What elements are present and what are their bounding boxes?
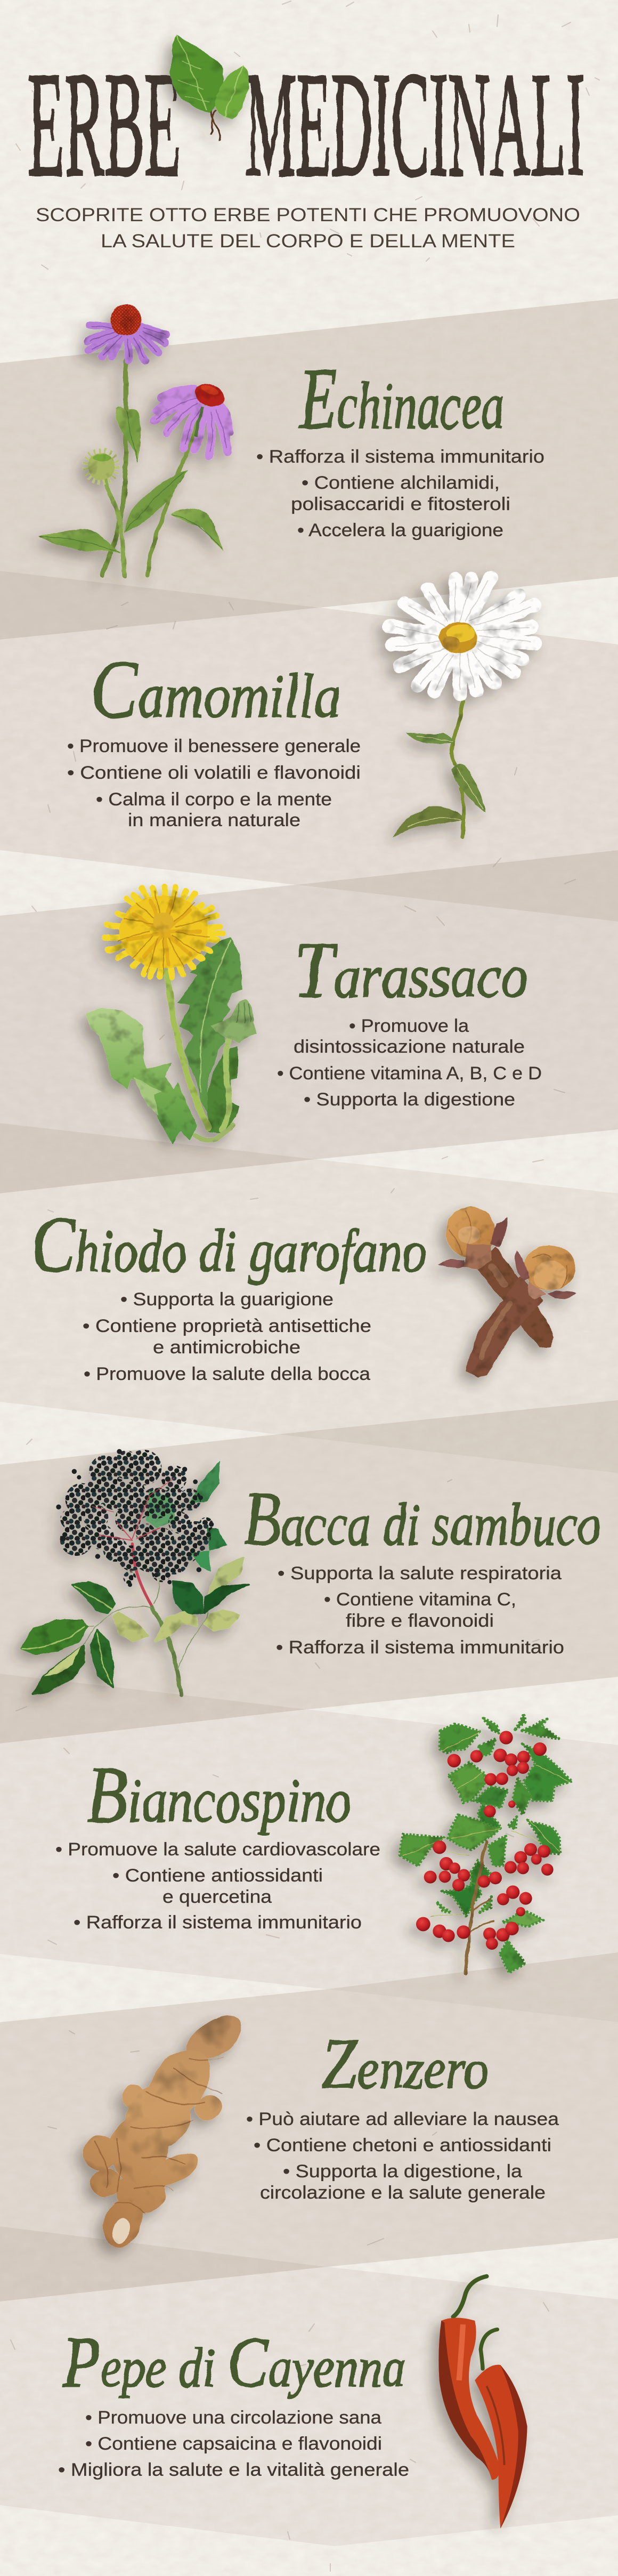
heading: Tarassaco: Tarassaco [294, 926, 528, 1014]
heading: Pepe di Cayenna: Pepe di Cayenna [62, 2323, 406, 2402]
heading: Biancospino: Biancospino [87, 1750, 352, 1839]
text: echinacea benefits: • Contiene alchilamidi, [302, 473, 500, 493]
text: sambuco benefits: fibre e flavonoidi [346, 1611, 494, 1631]
fold: right shadow 6 [327, 1952, 618, 2022]
text: camomilla benefits: in maniera naturale [128, 810, 300, 830]
text: sambuco benefits: • Supporta la salute respiratoria [278, 1563, 562, 1584]
text: chiodo benefits: e antimicrobiche [153, 1337, 300, 1358]
text: biancospino benefits: e quercetina [162, 1887, 272, 1907]
text: chiodo benefits: • Promuove la salute della bocca [84, 1364, 370, 1384]
text: zenzero benefits [246, 2109, 559, 2203]
fold: left shadow 5 [0, 1674, 307, 1743]
illustration: dandelion [86, 886, 257, 1144]
band: chiodo di garofano [0, 1159, 618, 1434]
band: echinacea [0, 298, 618, 608]
text: biancospino benefits: • Rafforza il sistema immunitario [74, 1912, 362, 1933]
panel: echinacea [37, 304, 544, 576]
text: tarassaco benefits: disintossicazione naturale [294, 1037, 525, 1057]
heading: Echinacea: Echinacea [299, 350, 505, 447]
text: cayenna benefits [58, 2408, 409, 2480]
panel: title block: ERBE [28, 41, 181, 207]
text: zenzero benefits: • Supporta la digestione, la [283, 2161, 522, 2182]
text: chiodo benefits: • Supporta la guarigione [120, 1289, 334, 1310]
text: zenzero benefits: • Contiene chetoni e antiossidanti [254, 2135, 551, 2155]
illustration: elderberry [22, 1449, 249, 1695]
illustration: ginger root [83, 2006, 250, 2254]
band: pepe di cayenna [0, 2267, 618, 2546]
text: echinacea benefits: polisaccaridi e fitosteroli [291, 494, 510, 514]
subtitle: LA SALUTE DEL CORPO E DELLA MENTE [101, 231, 515, 252]
text: sambuco benefits [276, 1563, 564, 1658]
panel: tarassaco [86, 886, 542, 1144]
text: echinacea benefits [256, 447, 544, 540]
subtitle [36, 205, 580, 252]
text: zenzero benefits: circolazione e la salute generale [260, 2183, 546, 2203]
band: bacca di sambuco [0, 1434, 618, 1709]
fold: right shadow 4 [277, 1400, 618, 1473]
fold: left shadow 7 [0, 2226, 327, 2302]
subtitle: SCOPRITE OTTO ERBE POTENTI CHE PROMUOVONO [36, 205, 580, 225]
illustration: chamomile [390, 577, 535, 838]
text: camomilla benefits [67, 736, 361, 830]
illustration: cloves [438, 1206, 576, 1377]
panel: zenzero [83, 2006, 559, 2254]
icon: basil leaves [170, 34, 248, 141]
band: biancospino [0, 1709, 618, 1989]
text: camomilla benefits: • Promuove il benessere generale [67, 736, 361, 756]
text: cayenna benefits: • Contiene capsaicina e flavonoidi [85, 2434, 382, 2454]
text: biancospino benefits [55, 1839, 380, 1933]
illustration: cayenne peppers [438, 2276, 527, 2529]
text: cayenna benefits: • Migliora la salute e la vitalità generale [58, 2460, 409, 2480]
fold: left shadow 1 [0, 571, 320, 640]
text: sambuco benefits: • Rafforza il sistema immunitario [276, 1637, 564, 1658]
text: camomilla benefits: • Contiene oli volatili e flavonoidi [67, 763, 361, 783]
text: camomilla benefits: • Calma il corpo e la mente [96, 789, 332, 810]
panel: bacca di sambuco [22, 1449, 601, 1695]
text: cayenna benefits: • Promuove una circolazione sana [85, 2408, 381, 2428]
panel: chiodo di garofano [31, 1200, 576, 1384]
fold: right shadow 2 [296, 850, 618, 922]
illustration: hawthorn [401, 1714, 573, 1974]
text: tarassaco benefits: • Supporta la digestione [304, 1089, 515, 1110]
text: chiodo benefits [83, 1289, 371, 1384]
heading: Zenzero: Zenzero [321, 2024, 489, 2104]
band: tarassaco [0, 885, 618, 1159]
fold: left shadow 3 [0, 1123, 315, 1193]
band: camomilla [0, 608, 618, 885]
heading: Chiodo di garofano: Chiodo di garofano [31, 1200, 427, 1289]
panel: biancospino [55, 1714, 573, 1974]
panel: pepe di cayenna [58, 2276, 527, 2529]
panel: title block [28, 34, 585, 252]
text: tarassaco benefits: • Promuove la [349, 1016, 469, 1036]
text: biancospino benefits: • Promuove la salute cardiovascolare [55, 1839, 380, 1860]
text: sambuco benefits: • Contiene vitamina C, [324, 1589, 516, 1610]
text: echinacea benefits: • Rafforza il sistema immunitario [256, 447, 544, 467]
text: zenzero benefits: • Può aiutare ad alleviare la nausea [246, 2109, 559, 2129]
text: biancospino benefits: • Contiene antiossidanti [112, 1866, 323, 1886]
band: zenzero [0, 1989, 618, 2267]
text: chiodo benefits: • Contiene proprietà antisettiche [83, 1316, 371, 1336]
text: echinacea benefits: • Accelera la guarigione [297, 520, 503, 540]
text: tarassaco benefits: • Contiene vitamina A, B, C e D [277, 1063, 542, 1084]
illustration: echinacea [37, 304, 229, 576]
panel: camomilla [67, 577, 535, 838]
heading: Camomilla: Camomilla [91, 643, 341, 735]
text: tarassaco benefits [277, 1016, 542, 1110]
